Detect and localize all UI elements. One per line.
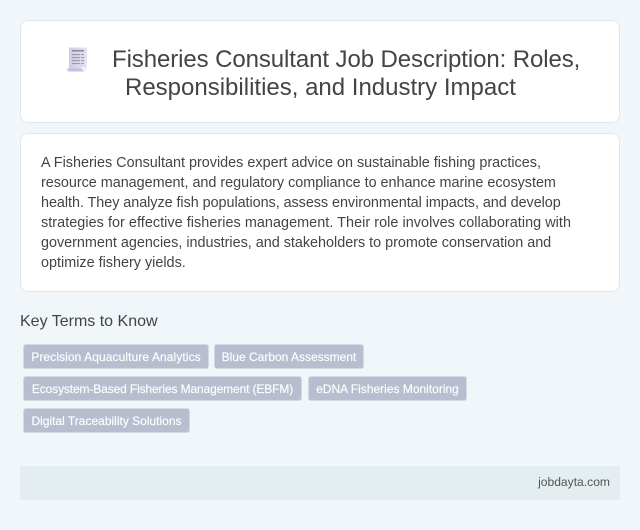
tag: digital traceability: Digital Traceability Solutions xyxy=(31,414,182,428)
description text: government agencies, industries, and stakeholders to promote conservation and xyxy=(41,235,551,251)
description text xyxy=(41,155,571,271)
tag: eDNA xyxy=(308,376,467,401)
description text: optimize fishery yields. xyxy=(41,255,186,271)
tag: precision aquaculture xyxy=(23,344,209,369)
panel: description card xyxy=(20,133,620,292)
tag: EBFM xyxy=(23,376,302,401)
icon: document scroll xyxy=(67,48,87,72)
tag: blue carbon xyxy=(214,344,364,369)
panel: title card xyxy=(20,20,620,123)
description text: health. They analyze fish populations, assess environmental impacts, and develop xyxy=(41,195,561,211)
description text: resource management, and regulatory compliance to enhance marine ecosystem xyxy=(41,175,556,191)
tag: EBFM: Ecosystem-Based Fisheries Management (EBFM) xyxy=(32,382,293,396)
footer bar xyxy=(20,466,620,500)
tag: precision aquaculture: Precision Aquaculture Analytics xyxy=(31,350,201,364)
heading: key terms: Key Terms to Know xyxy=(20,313,158,330)
tag: eDNA: eDNA Fisheries Monitoring xyxy=(316,382,459,396)
description text: strategies for effective fisheries management. Their role involves collaborating with xyxy=(41,215,571,231)
title line 2: Responsibilities, and Industry Impact xyxy=(125,74,516,101)
footer source: jobdayta.com xyxy=(538,475,610,489)
tag: digital traceability xyxy=(23,408,190,433)
title line 1: Fisheries Consultant Job Description: Roles, xyxy=(112,46,580,73)
tag: blue carbon: Blue Carbon Assessment xyxy=(222,350,356,364)
description text: A Fisheries Consultant provides expert advice on sustainable fishing practices, xyxy=(41,155,541,171)
